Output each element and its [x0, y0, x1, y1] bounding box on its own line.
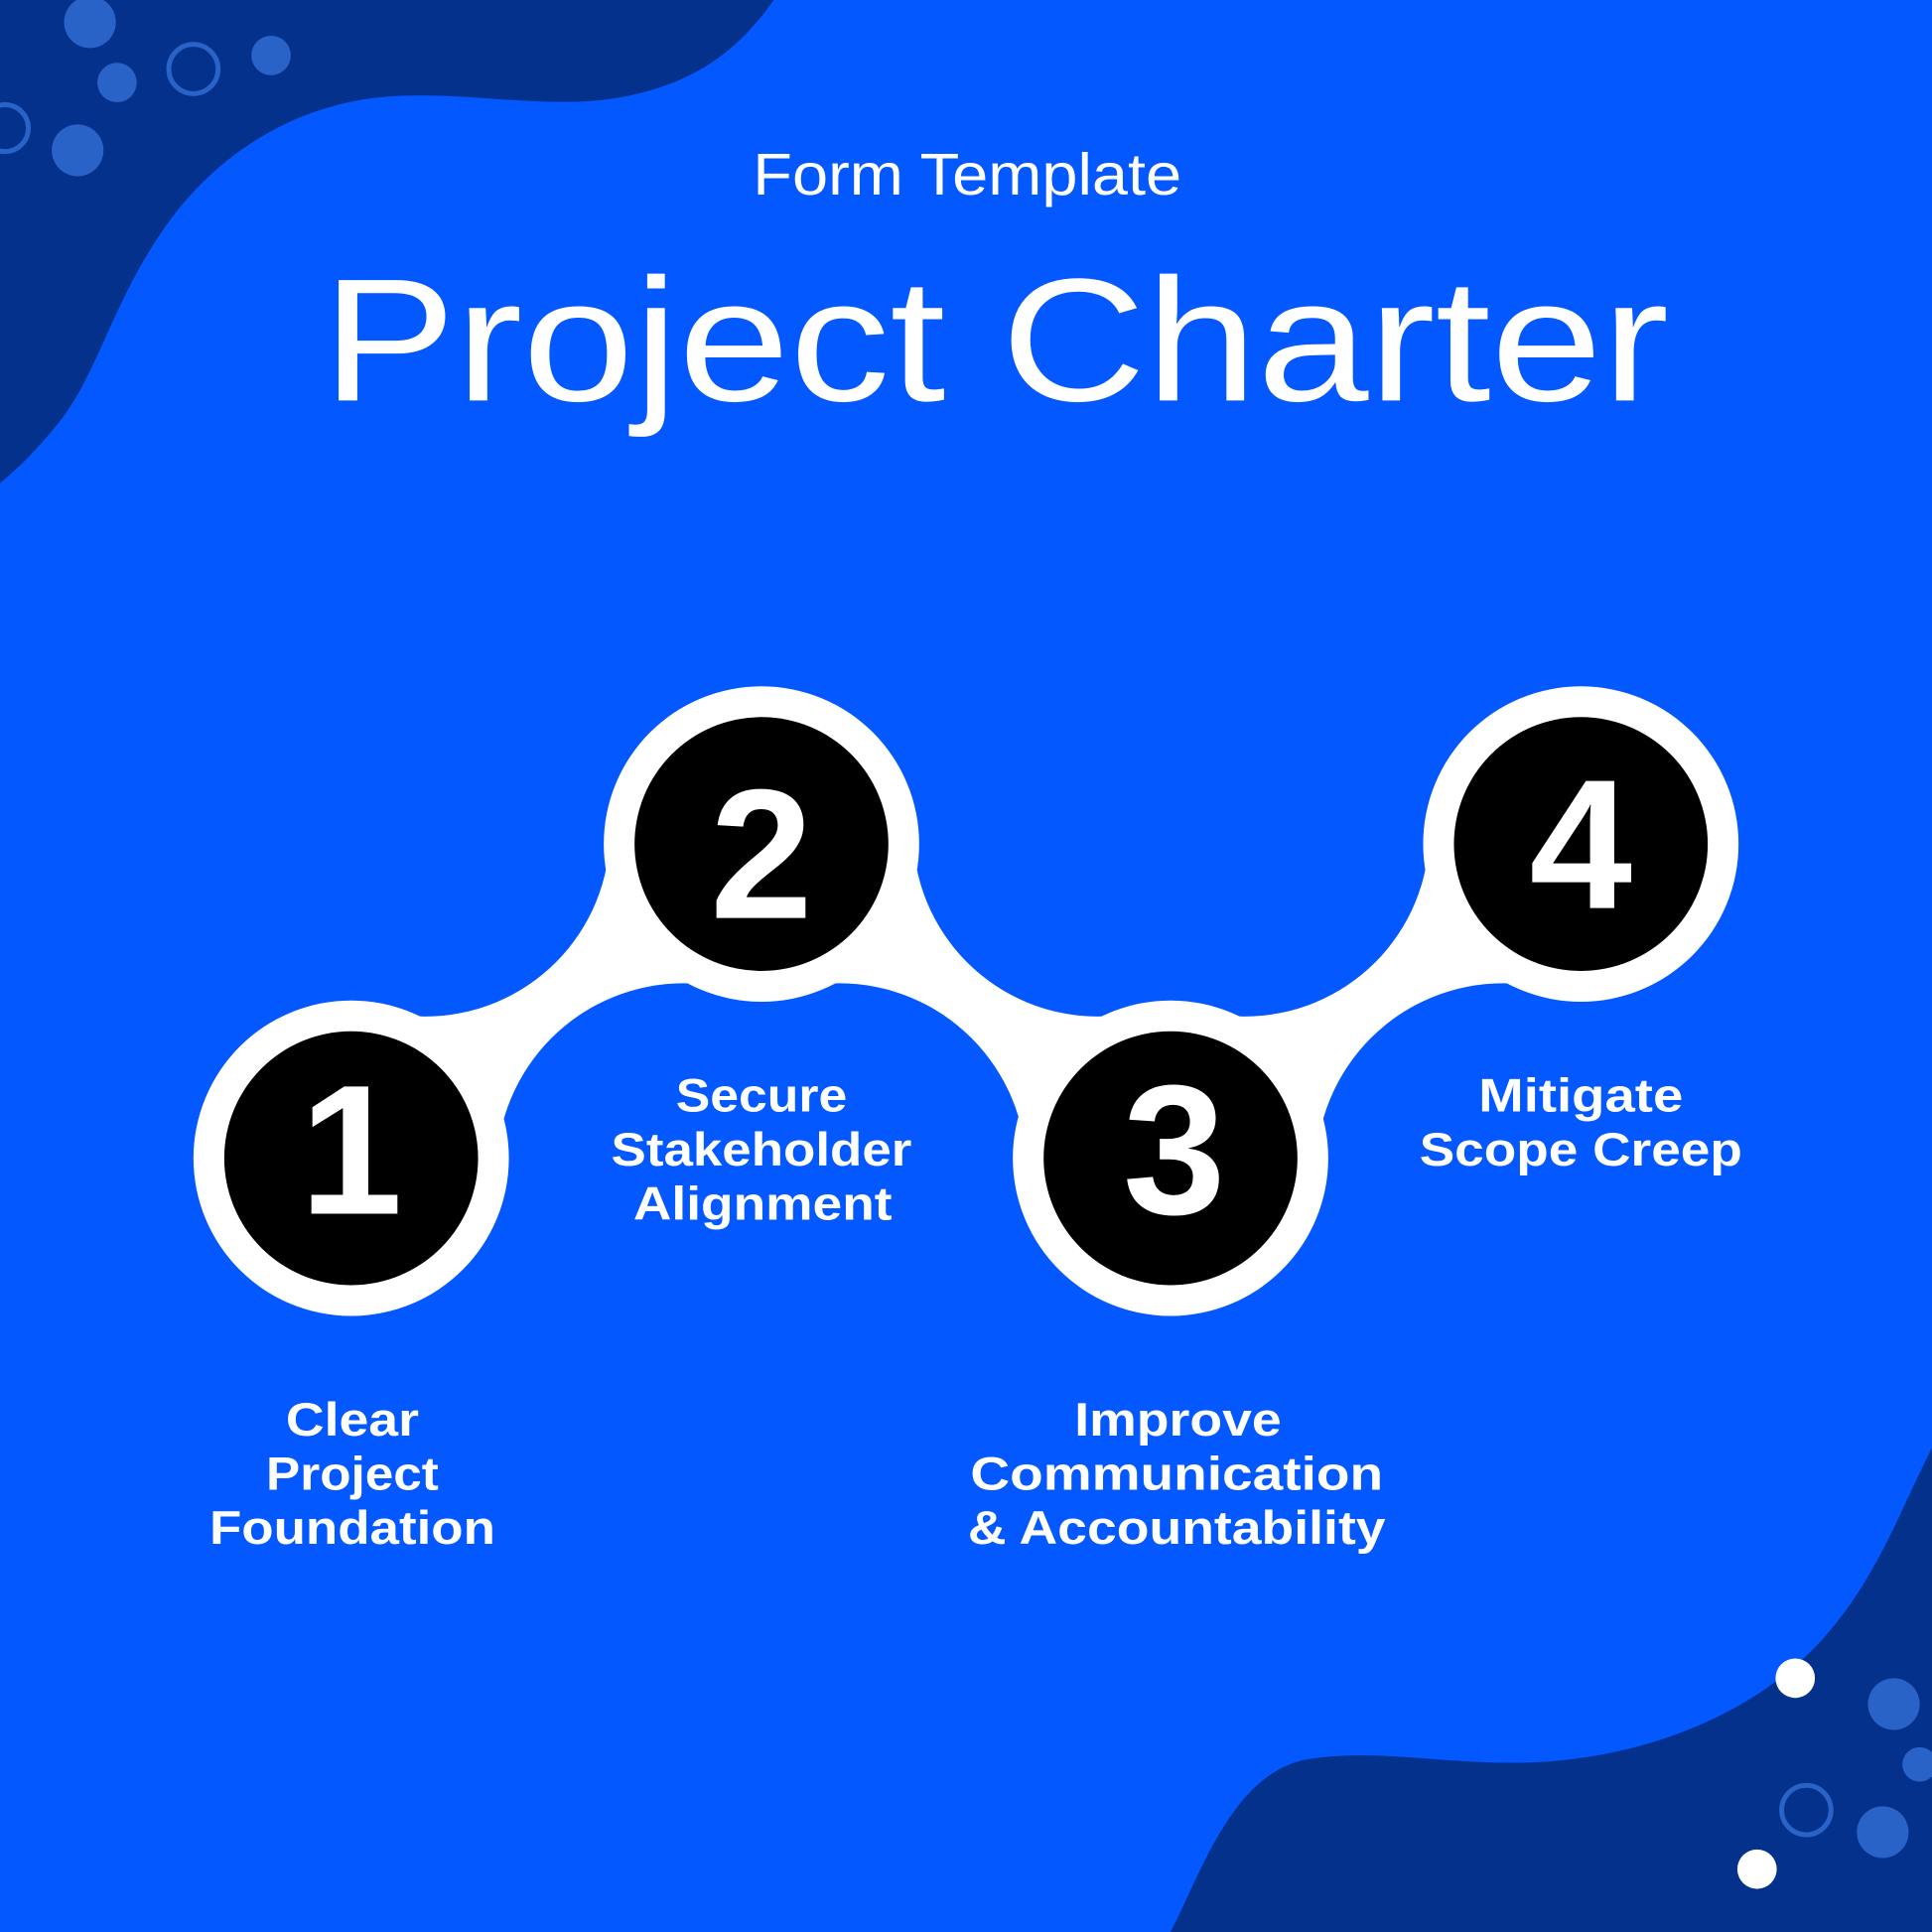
label 4: Scope Creep — [1420, 1123, 1742, 1175]
label 3: Communication — [970, 1447, 1383, 1499]
label 2: Secure — [676, 1068, 847, 1121]
step 1 circle: 1 — [300, 1046, 402, 1253]
label 1: Project — [266, 1447, 439, 1499]
label 2: Alignment — [633, 1177, 893, 1230]
label 1 — [209, 1393, 495, 1554]
step 2 circle — [634, 717, 889, 971]
step 2 circle: 2 — [710, 752, 813, 958]
subtitle: Form Template — [753, 141, 1181, 207]
step 4 circle — [1453, 717, 1708, 971]
label 3: & Accountability — [968, 1501, 1386, 1554]
title: Project Charter — [323, 242, 1669, 438]
step 1 circle — [224, 1032, 479, 1285]
label 2 — [612, 1068, 911, 1230]
label 3: Improve — [1074, 1393, 1282, 1446]
step 4 circle: 4 — [1530, 742, 1632, 948]
step 3 circle: 3 — [1123, 1046, 1226, 1253]
label 2: Stakeholder — [612, 1123, 911, 1175]
decoration: bottom-right blob — [1171, 1448, 1932, 1932]
label 3 — [968, 1393, 1386, 1554]
step 3 circle — [1043, 1032, 1298, 1285]
decoration: top-left blob — [0, 0, 773, 483]
label 1: Clear — [286, 1393, 419, 1446]
label 4 — [1420, 1068, 1742, 1175]
label 4: Mitigate — [1478, 1068, 1683, 1121]
label 1: Foundation — [209, 1501, 495, 1554]
chain diagram — [194, 647, 1828, 1405]
